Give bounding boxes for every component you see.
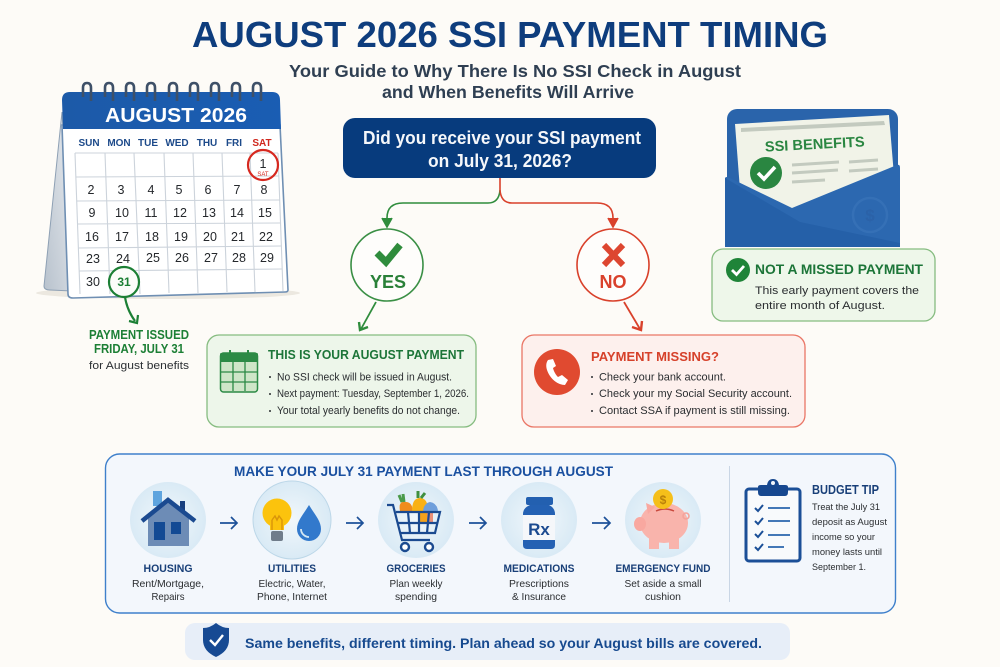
calendar dates: 3: [118, 183, 125, 197]
item: medications: [501, 482, 577, 603]
calendar dates: 30: [86, 275, 100, 289]
icon: green calendar: [220, 350, 258, 392]
question box: on July 31, 2026?: [428, 150, 572, 171]
payment issued note: for August benefits: [89, 360, 190, 372]
calendar weekdays: MON: [107, 138, 131, 149]
arrow: [469, 517, 486, 529]
subtitle: Your Guide to Why There Is No SSI Check in August: [289, 61, 741, 81]
callout: not a missed payment: This early payment covers the: [755, 285, 919, 297]
item: emergency fund: [616, 482, 711, 603]
item: utilities: [253, 481, 331, 603]
no circle: [577, 229, 649, 301]
calendar dates: 25: [146, 251, 160, 265]
banner: same benefits: Same benefits, different timing. Plan ahead so your August bills are covered.: [245, 635, 762, 651]
calendar dates: 26: [175, 251, 189, 265]
subtitle: and When Benefits Will Arrive: [382, 82, 634, 102]
calendar dates: 6: [205, 183, 212, 197]
calendar dates: [85, 157, 274, 289]
green circle: 31: [109, 267, 139, 297]
item: housing: [130, 482, 206, 603]
item: utilities: Phone, Internet: [257, 591, 327, 603]
budget tip: money lasts until: [812, 547, 882, 558]
callout: not a missed payment: entire month of August.: [755, 300, 885, 312]
calendar dates: 27: [204, 251, 218, 265]
calendar weekdays: [78, 138, 272, 149]
icon: shield: [203, 623, 229, 657]
calendar dates: 23: [86, 252, 100, 266]
calendar dates: 28: [232, 251, 246, 265]
calendar weekdays: FRI: [226, 138, 242, 149]
calendar weekdays: THU: [197, 138, 217, 149]
budget tip: deposit as August: [812, 517, 887, 528]
payment issued note: [89, 328, 190, 372]
budget tip: [812, 483, 887, 573]
arrow: [346, 517, 363, 529]
panel: this is your august payment: [207, 335, 476, 427]
calendar dates: 12: [173, 206, 187, 220]
banner: same benefits: [185, 623, 790, 660]
calendar dates: 29: [260, 251, 274, 265]
budget tip: September 1.: [812, 562, 866, 573]
payment issued note: PAYMENT ISSUED: [89, 328, 189, 342]
calendar dates: 2: [88, 183, 95, 197]
bullets: Your total yearly benefits do not change.: [277, 405, 460, 417]
connector: to no: [500, 178, 618, 227]
calendar rings: [83, 83, 261, 101]
panel: payment missing: [522, 335, 805, 427]
calendar weekdays: TUE: [138, 138, 158, 149]
panel: budget strip: [106, 454, 896, 613]
budget tip: Treat the July 31: [812, 502, 880, 513]
item: emergency fund: cushion: [645, 591, 681, 603]
title: AUGUST 2026 SSI PAYMENT TIMING: [192, 14, 828, 55]
calendar weekdays: SAT: [252, 138, 272, 149]
budget tip: income so your: [812, 532, 876, 543]
connector: to yes: [382, 190, 500, 227]
icon: clipboard: [746, 479, 800, 561]
item: emergency fund: Set aside a small: [624, 578, 702, 590]
callout: not a missed payment: [712, 249, 935, 321]
calendar dates: 22: [259, 230, 273, 244]
arrow: no to red box: [624, 302, 642, 330]
budget tip: BUDGET TIP: [812, 483, 879, 497]
bullets: Contact SSA if payment is still missing.: [599, 405, 790, 417]
arrow: [592, 517, 610, 529]
item: groceries: GROCERIES: [386, 563, 446, 575]
bullets: Check your my Social Security account.: [599, 388, 792, 400]
calendar dates: 1: [260, 157, 267, 171]
arrow: [220, 517, 237, 529]
calendar dates: 5: [176, 183, 183, 197]
icon: envelope with SSI benefits letter: [725, 109, 900, 247]
item: groceries: spending: [395, 591, 437, 603]
arrow: calendar to payment note: [125, 297, 138, 323]
item: housing: HOUSING: [144, 563, 192, 575]
item: medications: & Insurance: [512, 591, 566, 603]
calendar dates: 21: [231, 230, 245, 244]
item: medications: MEDICATIONS: [504, 563, 574, 575]
bullets: [591, 372, 792, 417]
bullets: [269, 372, 469, 417]
calendar dates: 11: [145, 206, 158, 220]
question box: Did you receive your SSI payment: [363, 127, 641, 148]
calendar weekdays: SUN: [78, 138, 100, 149]
item: housing: Repairs: [152, 591, 184, 603]
yes circle: [351, 229, 423, 301]
bullets: Check your bank account.: [599, 372, 726, 384]
item: medications: Rx: [528, 520, 550, 539]
icon: check badge: [726, 258, 750, 282]
item: medications: Prescriptions: [509, 578, 569, 590]
item: utilities: Electric, Water,: [258, 578, 326, 590]
item: utilities: UTILITIES: [268, 563, 316, 575]
item: emergency fund: $: [660, 493, 667, 507]
calendar dates: 15: [258, 206, 272, 220]
heading: THIS IS YOUR AUGUST PAYMENT: [268, 348, 464, 362]
calendar grid: [75, 153, 283, 294]
red circle: Saturday 1: [248, 150, 278, 180]
item: housing: Rent/Mortgage,: [132, 578, 204, 590]
item: groceries: [378, 482, 454, 603]
calendar: [36, 83, 300, 299]
calendar dates: 18: [145, 230, 159, 244]
red circle: Saturday 1: SAT: [257, 172, 269, 178]
calendar weekdays: WED: [165, 138, 189, 149]
calendar dates: 19: [174, 230, 188, 244]
arrow: yes to green box: [359, 302, 376, 330]
item: groceries: Plan weekly: [390, 578, 443, 590]
icon: phone: [534, 349, 580, 395]
calendar dates: 4: [148, 183, 155, 197]
question box: [343, 118, 656, 178]
calendar dates: 13: [202, 206, 216, 220]
heading: PAYMENT MISSING?: [591, 349, 719, 364]
green circle: 31: 31: [117, 275, 131, 289]
heading: MAKE YOUR JULY 31 PAYMENT LAST THROUGH AUGUST: [234, 463, 613, 479]
calendar dates: 24: [116, 252, 130, 266]
subtitle: [289, 61, 741, 102]
calendar dates: 10: [115, 206, 129, 220]
bullets: No SSI check will be issued in August.: [277, 372, 452, 384]
calendar dates: 7: [234, 183, 241, 197]
yes circle: YES: [370, 272, 406, 292]
calendar dates: 14: [230, 206, 244, 220]
calendar dates: 16: [85, 230, 99, 244]
payment issued note: FRIDAY, JULY 31: [94, 342, 184, 356]
calendar dates: 8: [261, 183, 268, 197]
no circle: NO: [600, 272, 626, 292]
calendar dates: 9: [89, 206, 96, 220]
bullets: Next payment: Tuesday, September 1, 2026.: [277, 388, 469, 400]
callout: not a missed payment: NOT A MISSED PAYMENT: [755, 261, 923, 277]
item: emergency fund: EMERGENCY FUND: [616, 563, 711, 575]
calendar dates: 17: [115, 230, 129, 244]
calendar month: AUGUST 2026: [105, 105, 247, 127]
icon: envelope with SSI benefits letter: $: [865, 206, 875, 225]
icon: envelope with SSI benefits letter: SSI BENEFITS: [764, 134, 865, 156]
calendar dates: 20: [203, 230, 217, 244]
